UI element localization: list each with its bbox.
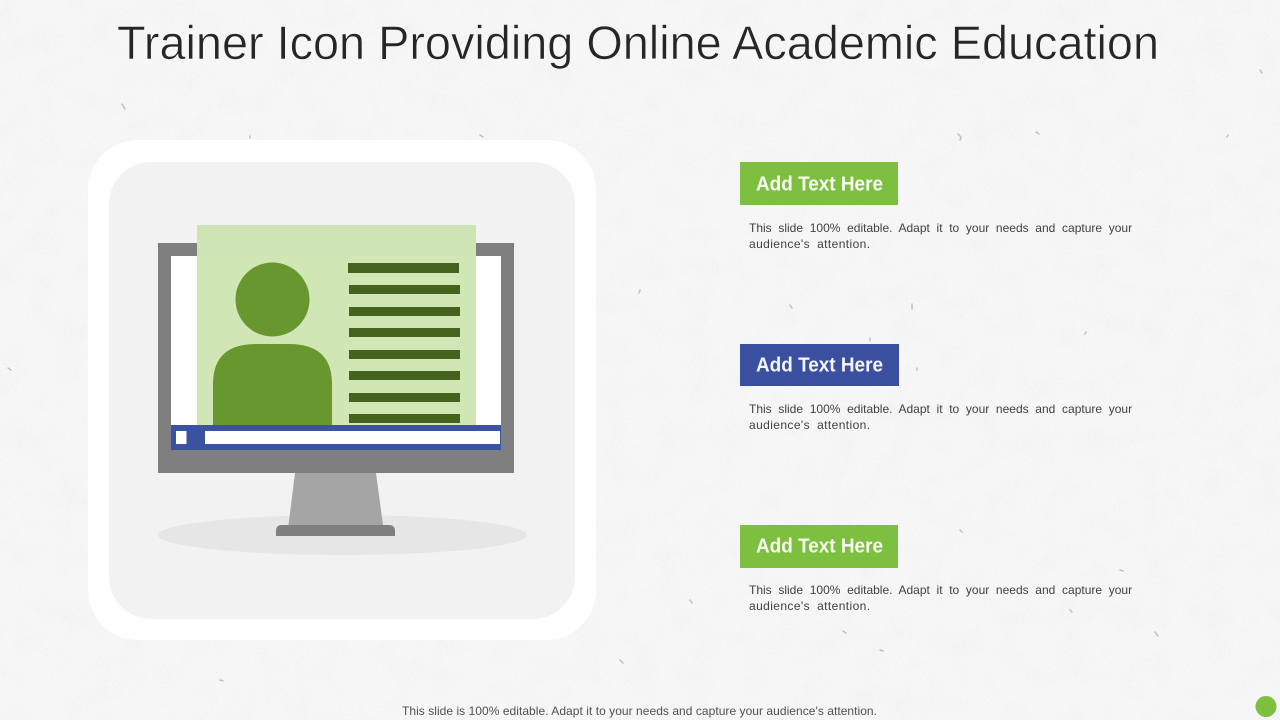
text block 2: audience's attention. [749,418,870,432]
text block 2: This slide 100% editable. Adapt it to your needs and capture your [749,402,1132,416]
monitor screen [171,256,501,426]
text block 3: audience's attention. [749,599,870,613]
heading button 3: Add Text Here [756,536,883,558]
footer note: This slide is 100% editable. Adapt it to your needs and capture your audience's attention. [402,704,877,718]
monitor stand [288,473,383,525]
text block 1: audience's attention. [749,237,870,251]
text block 1: This slide 100% editable. Adapt it to your needs and capture your [749,221,1132,235]
trainer head [236,262,310,336]
heading button 1 [740,162,898,205]
green profile sheet [197,225,476,425]
heading button 3 [740,525,898,568]
text block 1 [749,221,1132,251]
monitor shadow [158,515,527,555]
item 1 [740,162,1132,251]
blue control bar [171,425,501,450]
panel: illustration card [88,140,596,640]
heading button 1: Add Text Here [756,174,883,196]
text block 3: This slide 100% editable. Adapt it to your needs and capture your [749,583,1132,597]
monitor base [276,525,395,536]
text block 2 [749,402,1132,432]
item 2 [740,344,1132,432]
icon: green dot [1256,696,1276,717]
monitor frame [158,243,514,473]
text block 3 [749,583,1132,613]
heading button 2: Add Text Here [756,354,883,376]
title: Trainer Icon Providing Online Academic Education [117,16,1159,69]
item 3 [740,525,1132,613]
trainer body [213,344,332,425]
text lines [348,263,460,423]
heading button 2 [740,344,899,386]
icon: monitor with online trainer [158,225,527,555]
